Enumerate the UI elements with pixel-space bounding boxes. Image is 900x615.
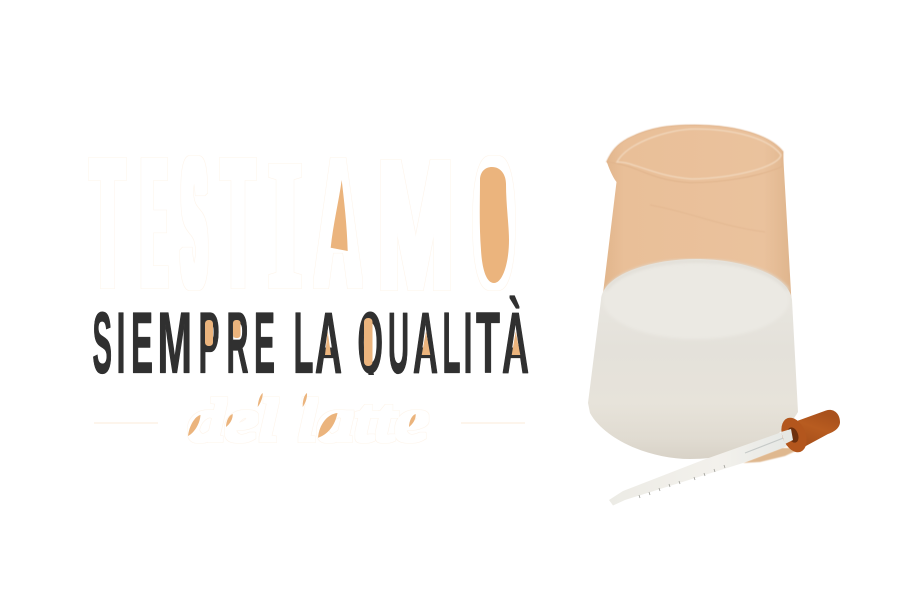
orange script counters (188, 393, 416, 438)
subtitle letters: L (294, 296, 314, 392)
subtitle letters: U (388, 296, 409, 392)
pipette glass tube (609, 431, 790, 506)
infographic canvas: O (475, 124, 513, 322)
beaker glass body (601, 125, 792, 310)
subtitle letters: E (254, 296, 275, 392)
illustration: pipette (609, 410, 840, 506)
subtitle letters: T (476, 296, 500, 392)
pipette tube highlight (745, 437, 786, 453)
script letters: del latte (188, 388, 428, 453)
subtitle letters: R (226, 296, 248, 392)
beaker rim highlight (617, 129, 781, 179)
beaker texture shading (650, 205, 765, 232)
title letters: E (143, 124, 165, 322)
subtitle letters: S (92, 296, 112, 392)
milk surface (603, 261, 789, 339)
bulb opening (785, 426, 801, 444)
subtitle letters (93, 295, 528, 375)
tube inside opening (781, 429, 793, 444)
subtitle letters: M (158, 296, 192, 392)
infographic canvas (88, 124, 840, 506)
orange letter counters (205, 318, 520, 366)
script line: del latte (94, 388, 525, 453)
pipette shadow (743, 448, 802, 463)
title letters: M (378, 126, 453, 324)
subtitle letters: L (442, 296, 460, 392)
subtitle letters: P (198, 296, 220, 392)
title: TESTIAMO (92, 124, 513, 324)
title letters: I (270, 127, 300, 323)
subtitle letters: I (464, 296, 472, 392)
subtitle letters: E (131, 296, 153, 392)
subtitle letters: I (116, 296, 126, 392)
title letters: S (183, 124, 205, 322)
title letters: T (223, 124, 253, 322)
title counter: letter O (480, 167, 509, 283)
right rule (461, 422, 525, 424)
title counter: letter A (331, 180, 348, 251)
title letters: A (318, 124, 358, 322)
rubber bulb (797, 410, 840, 447)
subtitle: SIEMPRE LA QUALITÀ (93, 295, 528, 375)
beaker rim outer band (607, 125, 783, 183)
milk surface top edge (606, 261, 788, 290)
milk body (588, 259, 798, 459)
subtitle letters: Q (358, 296, 383, 392)
title letters: T (92, 124, 123, 322)
infographic canvas: À (502, 296, 529, 392)
bulb flange (777, 414, 811, 456)
title letters (92, 124, 513, 324)
left rule (94, 422, 158, 424)
pipette graduation marks (639, 465, 725, 498)
illustration: glass beaker with milk (588, 125, 798, 459)
subtitle letters: A (315, 296, 342, 392)
subtitle letters: A (413, 296, 438, 392)
